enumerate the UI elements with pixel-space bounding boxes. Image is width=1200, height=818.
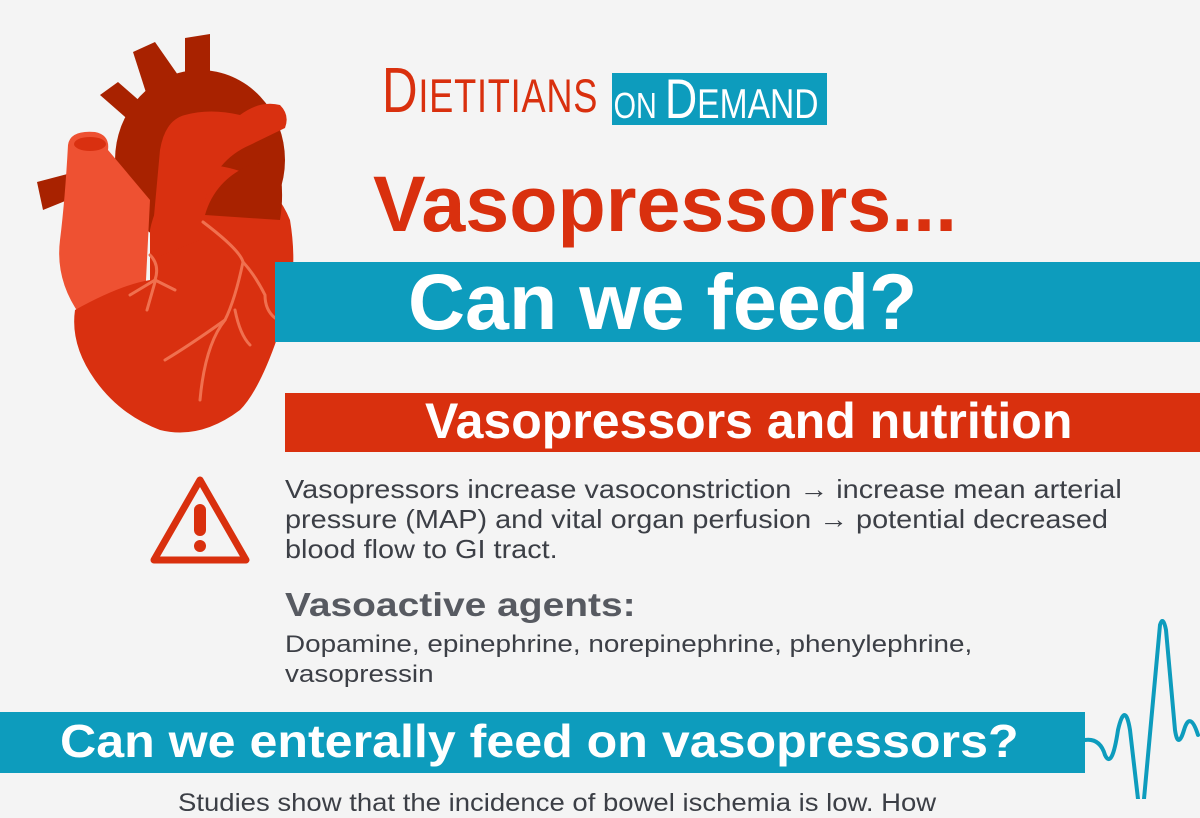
heading bar: enterally feed: Can we enterally feed on vasopressors?	[60, 715, 1019, 767]
text: vasoconstriction paragraph: pressure (MAP) and vital organ perfusion → potential decreased	[285, 504, 1108, 534]
text: vasoconstriction paragraph: blood flow to GI tract.	[285, 534, 558, 564]
heading: vasoactive agents: Vasoactive agents:	[285, 586, 636, 623]
text: agents list: vasopressin	[285, 661, 434, 688]
logo	[382, 54, 827, 126]
title: Vasopressors...	[373, 159, 957, 248]
icon: ECG line	[1085, 619, 1200, 799]
subtitle: Can we feed?	[408, 257, 917, 346]
icon: heart illustration	[37, 34, 294, 432]
text: vasoconstriction paragraph	[285, 474, 1122, 564]
banner: can we feed	[275, 262, 1200, 342]
heading bar: vasopressors and nutrition	[285, 393, 1200, 452]
text: agents list: Dopamine, epinephrine, norepinephrine, phenylephrine,	[285, 631, 972, 658]
text: vasoconstriction paragraph: Vasopressors increase vasoconstriction → increase mean arterial	[285, 474, 1122, 504]
text: agents list	[285, 631, 972, 688]
heading bar: vasopressors and nutrition: Vasopressors and nutrition	[425, 393, 1072, 449]
logo: Dietitians: DIETITIANS	[382, 54, 598, 126]
text: studies (cut off): Studies show that the incidence of bowel ischemia is low. How	[178, 789, 936, 817]
icon: warning triangle	[150, 476, 250, 564]
